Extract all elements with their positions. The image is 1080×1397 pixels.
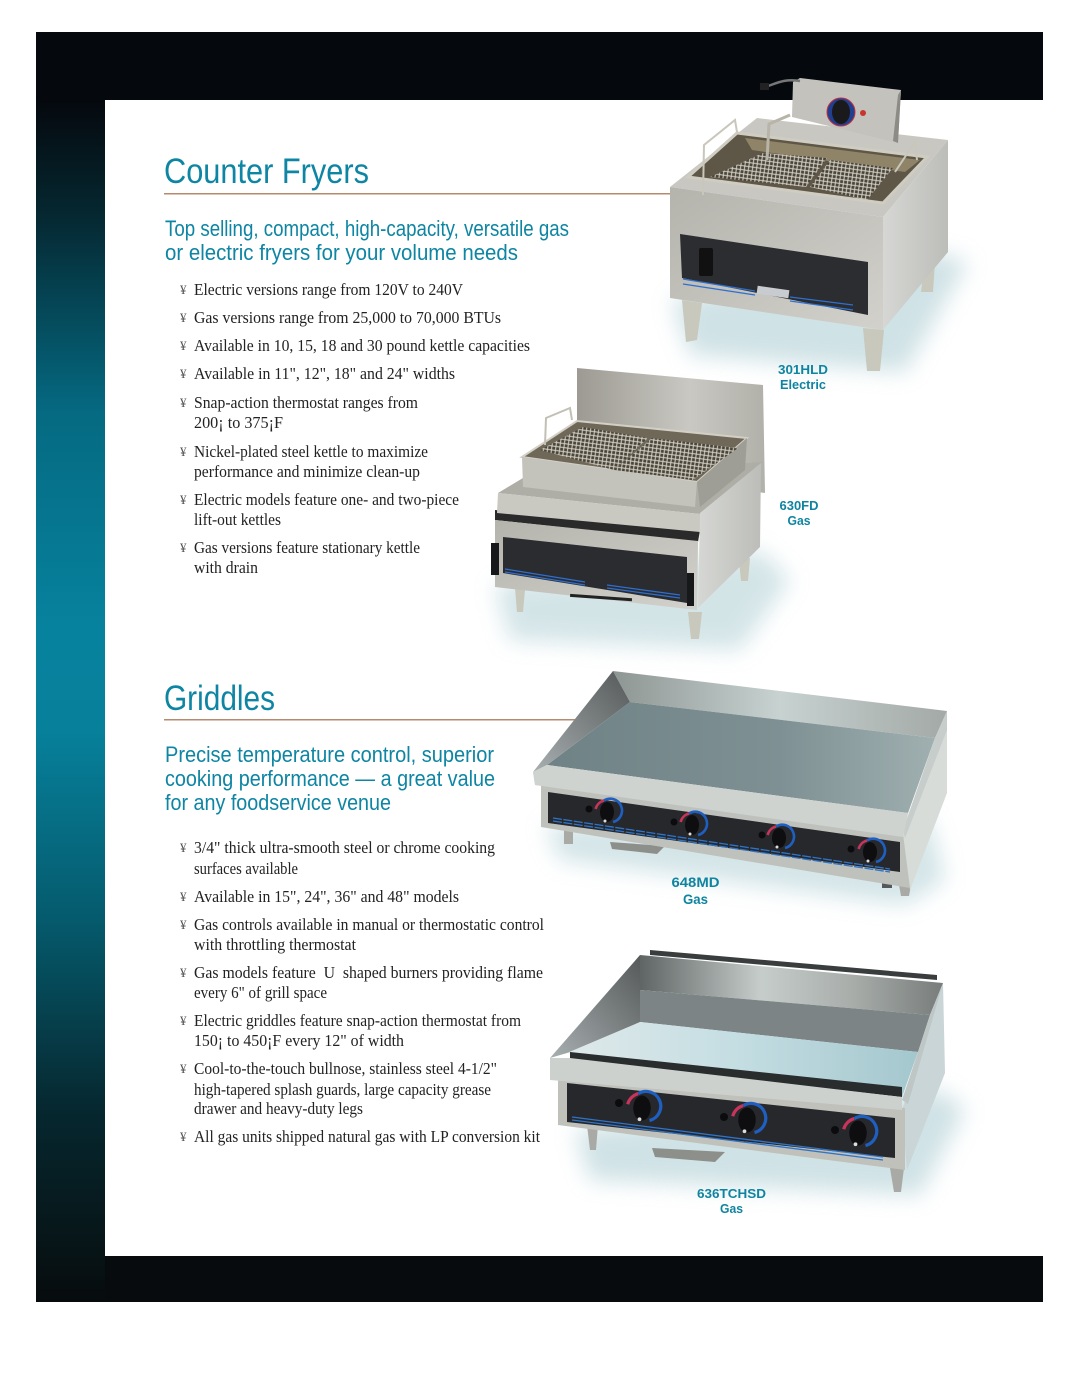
bullet list: fryers: Snap-action thermostat ranges from — [194, 393, 418, 412]
bullet list: griddles: ¥ — [180, 840, 187, 855]
heading: counter fryers: Counter Fryers — [164, 152, 369, 191]
bullet list: fryers: ¥ — [180, 540, 187, 555]
bullet list: griddles: high-tapered splash guards, large capacity grease — [194, 1080, 491, 1099]
product labels: fryers: 301HLD — [778, 362, 828, 377]
label: 636TCHSD — [697, 1186, 766, 1216]
bullet list: fryers: lift-out kettles — [194, 510, 281, 529]
bullet list: griddles: ¥ — [180, 917, 187, 932]
label: 636TCHSD: Gas — [720, 1201, 743, 1216]
bullet list: fryers: ¥ — [180, 366, 187, 381]
product photo: griddle 648MD — [533, 671, 947, 905]
bullet list: fryers: ¥ — [180, 282, 187, 297]
bullet list: fryers — [180, 280, 530, 577]
bullet list: griddles: All gas units shipped natural gas with LP conversion kit — [194, 1127, 540, 1146]
bullet list: griddles: ¥ — [180, 1129, 187, 1144]
section: counter fryers — [164, 152, 672, 577]
section: griddles — [164, 679, 576, 1146]
bullet list: fryers: Gas versions range from 25,000 to 70,000 BTUs — [194, 308, 501, 327]
bullet list: griddles: Cool-to-the-touch bullnose, stainless steel 4-1/2" — [194, 1059, 497, 1078]
bullet list: griddles: ¥ — [180, 889, 187, 904]
bullet list: griddles: surfaces available — [194, 859, 298, 878]
label: 648MD — [672, 874, 720, 907]
bullet list: griddles — [180, 838, 544, 1146]
bullet list: fryers: ¥ — [180, 395, 187, 410]
bullet list: griddles: drawer and heavy-duty legs — [194, 1099, 363, 1118]
subheading: griddles — [165, 742, 495, 815]
bullet list: griddles: Gas models feature U shaped burners providing flame — [194, 963, 543, 982]
bullet list: griddles: 150¡ to 450¡F every 12" of width — [194, 1031, 405, 1050]
bullet list: fryers: Available in 10, 15, 18 and 30 pound kettle capacities — [194, 336, 530, 355]
bullet list: griddles: 3/4" thick ultra-smooth steel or chrome cooking — [194, 838, 495, 857]
bullet list: griddles: every 6" of grill space — [194, 983, 327, 1002]
product labels: fryers: 630FD — [780, 498, 818, 513]
bullet list: fryers: ¥ — [180, 310, 187, 325]
bullet list: fryers: with drain — [194, 558, 258, 577]
rule under counter fryers heading — [164, 193, 672, 194]
bullet list: fryers: Electric models feature one- and two-piece — [194, 490, 459, 509]
bullet list: griddles: with throttling thermostat — [194, 935, 356, 954]
bullet list: fryers: Nickel-plated steel kettle to maximize — [194, 442, 428, 461]
bullet list: fryers: performance and minimize clean-up — [194, 462, 420, 481]
bullet list: griddles: ¥ — [180, 965, 187, 980]
bullet list: fryers: Available in 11", 12", 18" and 24" widths — [194, 364, 455, 383]
bullet list: griddles: Gas controls available in manual or thermostatic control — [194, 915, 544, 934]
label: 636TCHSD: 636TCHSD — [697, 1186, 766, 1201]
product labels: fryers — [778, 362, 828, 528]
bullet list: griddles: ¥ — [180, 1061, 187, 1076]
subheading: griddles: for any foodservice venue — [165, 790, 391, 815]
rule under griddles heading — [164, 719, 576, 720]
label: 648MD: 648MD — [672, 874, 720, 890]
product labels: fryers: Gas — [788, 513, 810, 528]
product labels: fryers: Electric — [780, 377, 826, 392]
product photo: griddle 636TCHSD — [550, 950, 965, 1195]
product photo: fryer 301HLD — [670, 78, 968, 372]
bullet list: griddles: Available in 15", 24", 36" and 48" models — [194, 887, 459, 906]
subheading: fryers — [165, 216, 569, 265]
subheading: griddles: cooking performance — a great value — [165, 766, 495, 791]
bullet list: fryers: ¥ — [180, 338, 187, 353]
bullet list: fryers: Gas versions feature stationary kettle — [194, 538, 420, 557]
heading: griddles: Griddles — [164, 679, 275, 718]
bullet list: fryers: 200¡ to 375¡F — [194, 413, 283, 432]
bullet list: griddles: Electric griddles feature snap-action thermostat from — [194, 1011, 521, 1030]
bullet list: griddles: ¥ — [180, 1013, 187, 1028]
bullet list: fryers: ¥ — [180, 492, 187, 507]
subheading: fryers: Top selling, compact, high-capacity, versatile gas — [165, 216, 569, 241]
label: 648MD: Gas — [683, 891, 708, 907]
subheading: fryers: or electric fryers for your volume needs — [165, 240, 518, 265]
bullet list: fryers: ¥ — [180, 444, 187, 459]
bullet list: fryers: Electric versions range from 120V to 240V — [194, 280, 463, 299]
product photo: fryer 630FD — [491, 368, 790, 650]
subheading: griddles: Precise temperature control, superior — [165, 742, 494, 767]
